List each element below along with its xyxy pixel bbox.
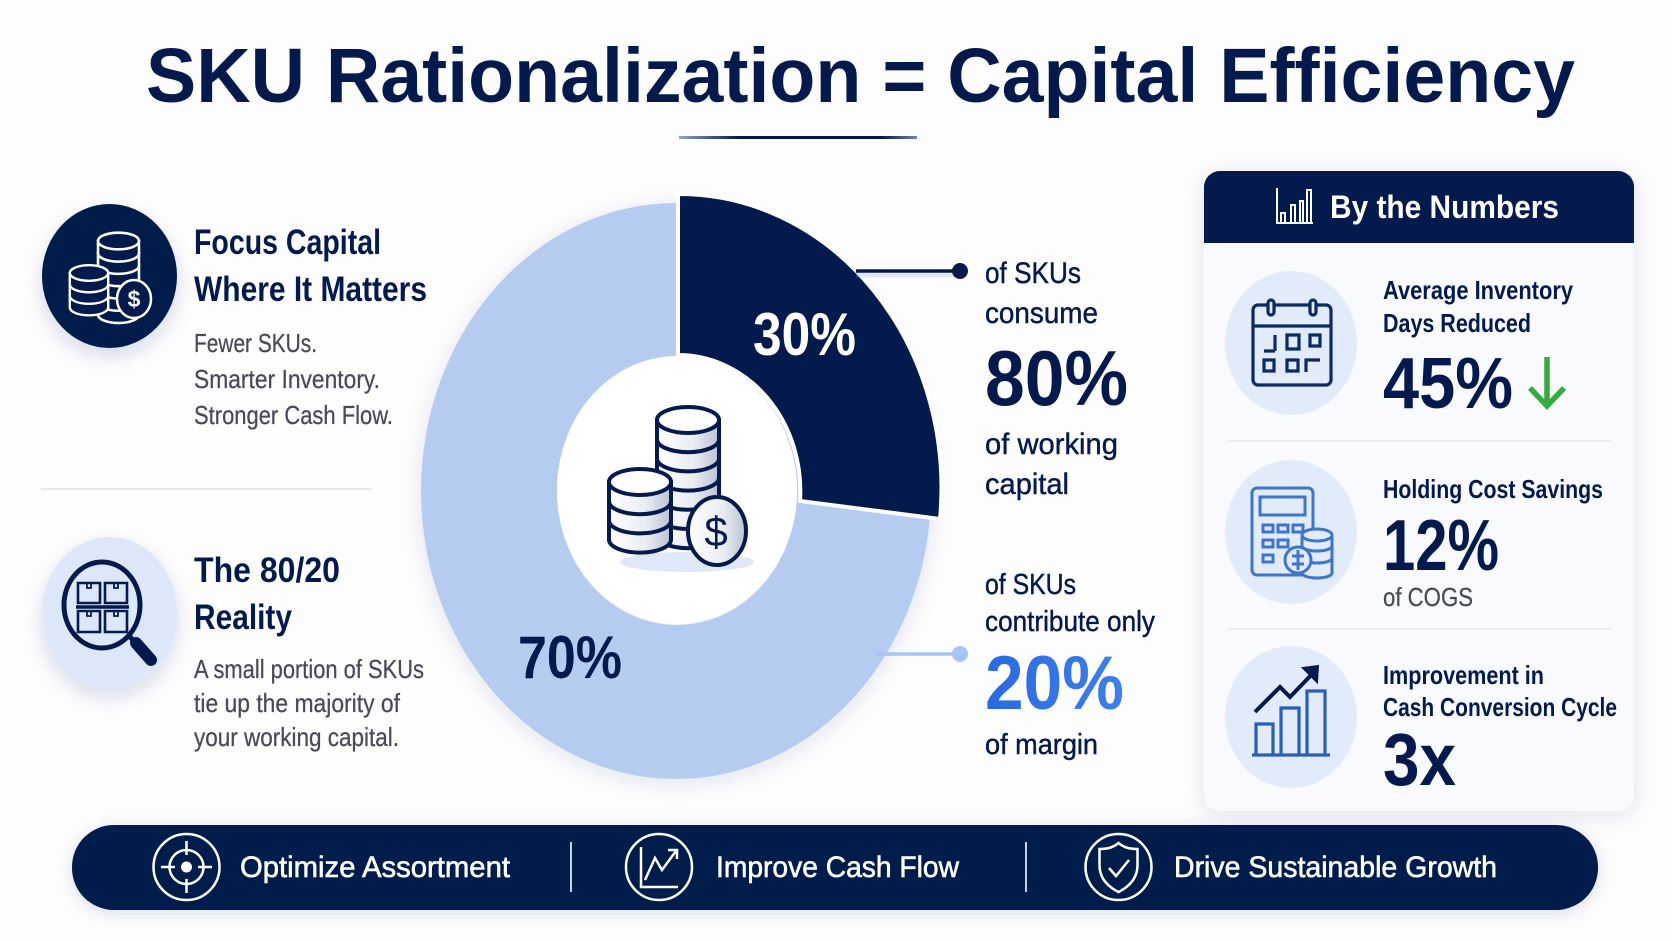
bottom banner — [72, 825, 1598, 910]
item: improve cash flow: Improve Cash Flow — [716, 851, 959, 884]
stat: inventory days: Days Reduced — [1383, 308, 1531, 338]
icon: down arrow — [1530, 357, 1564, 406]
leader line: dark — [856, 263, 968, 279]
callout: 30% of skus: capital — [985, 468, 1069, 501]
title underline — [679, 136, 917, 139]
callout: 70% of skus: of SKUs — [985, 569, 1076, 601]
title: SKU Rationalization = Capital Efficiency — [146, 33, 1575, 119]
segment: 30% — [678, 194, 941, 519]
item: drive sustainable growth: Drive Sustainable Growth — [1174, 851, 1497, 884]
panel: by the numbers — [1204, 171, 1634, 811]
text: small portion: tie up the majority of — [194, 688, 401, 718]
stat: cash conversion: Cash Conversion Cycle — [1383, 692, 1617, 722]
icon: coin stacks: $ — [704, 508, 728, 555]
icon: bar chart — [1276, 188, 1313, 223]
heading: the 80/20 reality: The 80/20 — [194, 551, 340, 590]
stat: inventory days: 45% — [1383, 344, 1513, 424]
panel: the 80/20 reality — [42, 537, 424, 752]
icon: target — [154, 834, 220, 900]
label: 70%: 70% — [518, 624, 622, 691]
item: improve cash flow — [626, 834, 959, 900]
stat: cash conversion: Improvement in — [1383, 660, 1544, 690]
stat: inventory days: Average Inventory — [1383, 275, 1573, 305]
icon: calendar — [1253, 300, 1331, 385]
icon: calculator and coins — [1252, 488, 1332, 578]
icon: rising chart — [1252, 666, 1330, 755]
heading: the 80/20 reality: Reality — [194, 598, 292, 637]
callout: 30% of skus: of SKUs — [985, 257, 1081, 290]
heading: focus capital: Focus Capital — [194, 223, 381, 262]
stat: holding cost: of COGS — [1383, 582, 1473, 612]
callout: 70% of skus — [985, 569, 1155, 761]
icon: shield check — [1086, 834, 1152, 900]
stat: holding cost: 12% — [1383, 506, 1499, 586]
item: optimize assortment — [154, 834, 511, 900]
callout: 30% of skus: 80% — [985, 334, 1128, 422]
callout: 30% of skus: of working — [985, 428, 1118, 461]
stat: inventory days — [1225, 271, 1573, 424]
text: fewer skus: Smarter Inventory. — [194, 364, 380, 394]
panel header — [1204, 171, 1634, 243]
callout: 70% of skus: contribute only — [985, 606, 1155, 638]
icon: coins on navy circle — [42, 204, 177, 348]
donut chart — [421, 194, 941, 779]
heading: focus capital: Where It Matters — [194, 270, 427, 309]
callout: 70% of skus: of margin — [985, 729, 1098, 761]
panel: focus capital — [42, 204, 427, 430]
icon: coin stacks — [609, 407, 754, 572]
center hole — [557, 356, 797, 624]
item: optimize assortment: Optimize Assortment — [240, 851, 511, 884]
callout: 30% of skus — [985, 257, 1128, 501]
stat: holding cost: Holding Cost Savings — [1383, 474, 1603, 504]
icon: magnifier over boxes — [42, 537, 177, 689]
icon: line chart — [626, 834, 692, 900]
stat: cash conversion: 3x — [1383, 718, 1456, 801]
icon: coins on navy circle: $ — [128, 286, 141, 312]
item: drive sustainable growth — [1086, 834, 1497, 900]
heading: By the Numbers — [1330, 189, 1559, 225]
stat: holding cost — [1225, 460, 1603, 612]
text: small portion: A small portion of SKUs — [194, 654, 424, 684]
text: small portion: your working capital. — [194, 722, 399, 752]
text: fewer skus: Stronger Cash Flow. — [194, 400, 393, 430]
callout: 70% of skus: 20% — [985, 641, 1124, 726]
segment: 70% — [421, 203, 931, 779]
stat: cash conversion — [1225, 646, 1617, 801]
leader line: light — [875, 646, 968, 662]
label: 30%: 30% — [753, 301, 856, 368]
callout: 30% of skus: consume — [985, 297, 1098, 330]
text: fewer skus: Fewer SKUs. — [194, 328, 317, 358]
